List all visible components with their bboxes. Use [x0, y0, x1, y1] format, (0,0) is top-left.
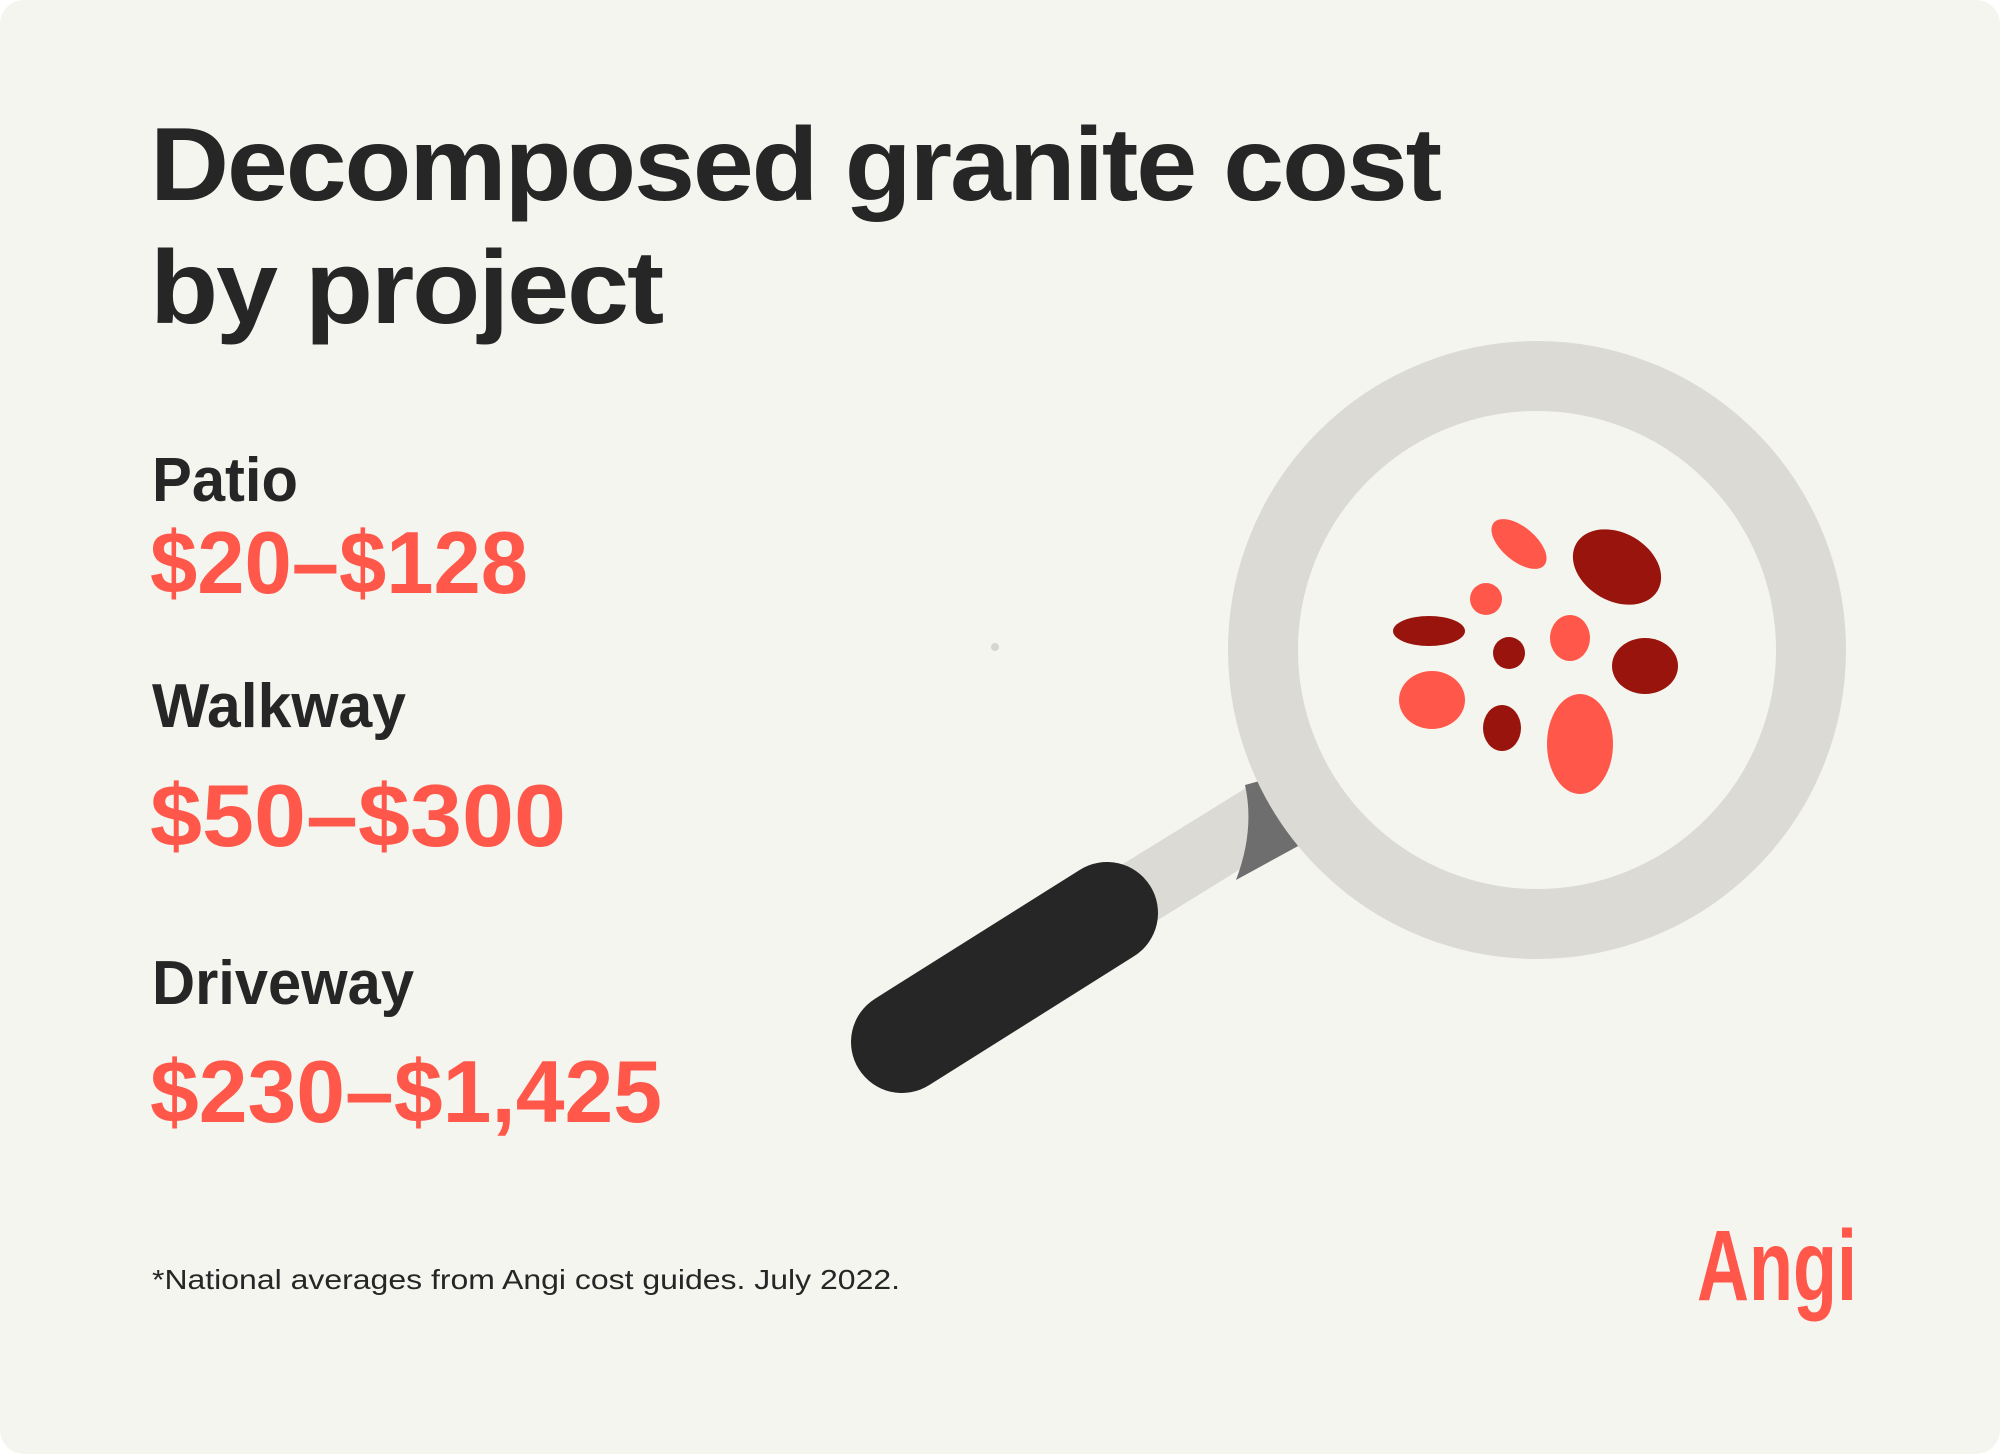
title: Decomposed granite cost: [150, 107, 1441, 223]
footnote: *National averages from Angi cost guides. July 2022.: [152, 1264, 900, 1295]
item: driveway: Driveway: [152, 949, 414, 1018]
item: walkway: $50–$300: [150, 766, 566, 865]
item: driveway: $230–$1,425: [150, 1042, 662, 1141]
item: patio: $20–$128: [150, 513, 528, 612]
item: walkway: Walkway: [152, 672, 406, 741]
item: walkway: [150, 672, 566, 865]
logo: Angi: Angi: [1697, 1210, 1857, 1322]
shaft: [1100, 775, 1330, 917]
ring: [1263, 376, 1811, 924]
small dot: [991, 643, 999, 651]
title: by project: [150, 230, 663, 346]
collar: [1236, 770, 1300, 880]
handle: [902, 913, 1107, 1042]
item: patio: Patio: [152, 446, 298, 515]
item: driveway: [150, 949, 662, 1141]
icon: magnifying glass: [902, 376, 1811, 1042]
title: [150, 107, 1441, 346]
item: patio: [150, 446, 528, 612]
granite particles: [1393, 510, 1678, 794]
cost list: [150, 446, 662, 1141]
lens: [1298, 411, 1776, 889]
